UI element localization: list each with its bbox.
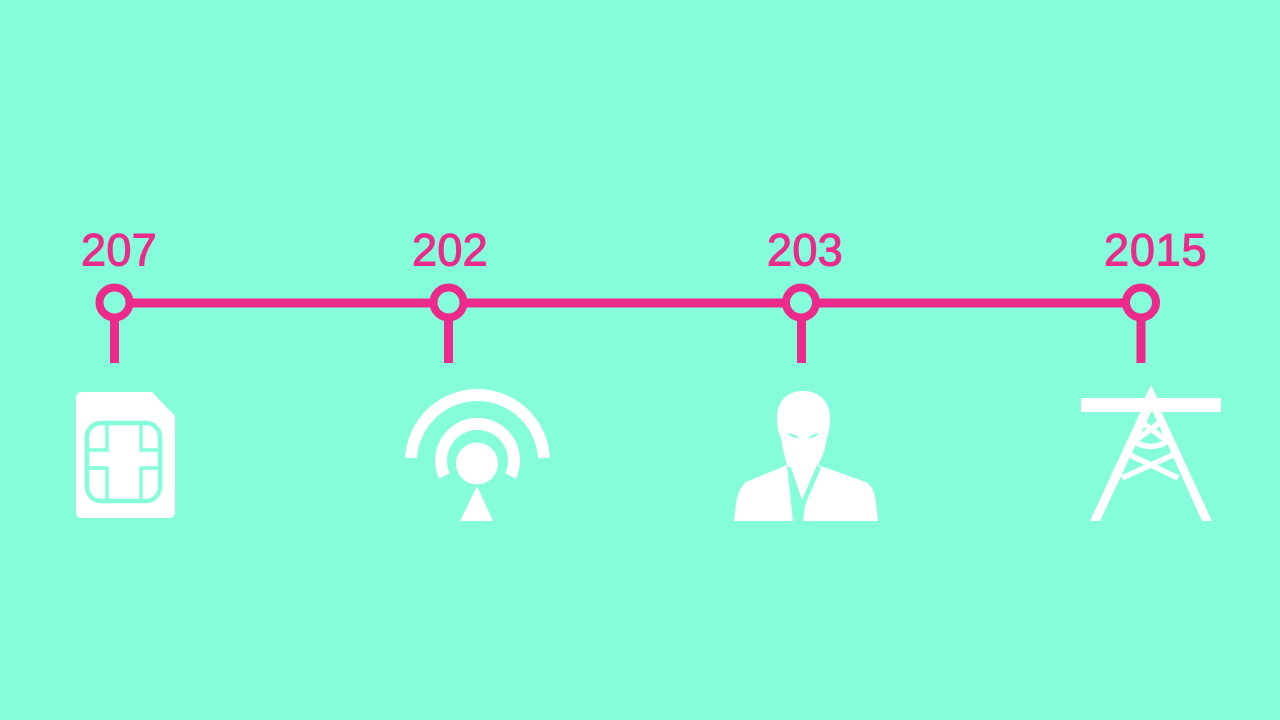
milestone 1 marker	[100, 288, 130, 363]
year label 2015: 2015	[1104, 224, 1207, 276]
icon: person in suit	[734, 391, 878, 521]
timeline axis	[114, 298, 1141, 308]
timeline	[100, 288, 1156, 363]
eyes	[787, 433, 819, 438]
icon: SIM card	[76, 392, 175, 518]
year label 207: 207	[81, 224, 157, 276]
year label 203: 203	[767, 224, 843, 276]
milestone 2 marker	[434, 288, 464, 363]
year label 202: 202	[412, 224, 488, 276]
collar and tie gap	[787, 465, 821, 521]
milestone 4 marker	[1126, 288, 1156, 363]
icon: transmission tower	[1081, 385, 1221, 521]
milestone 3 marker	[786, 288, 816, 363]
icon: wireless broadcast	[411, 395, 544, 521]
